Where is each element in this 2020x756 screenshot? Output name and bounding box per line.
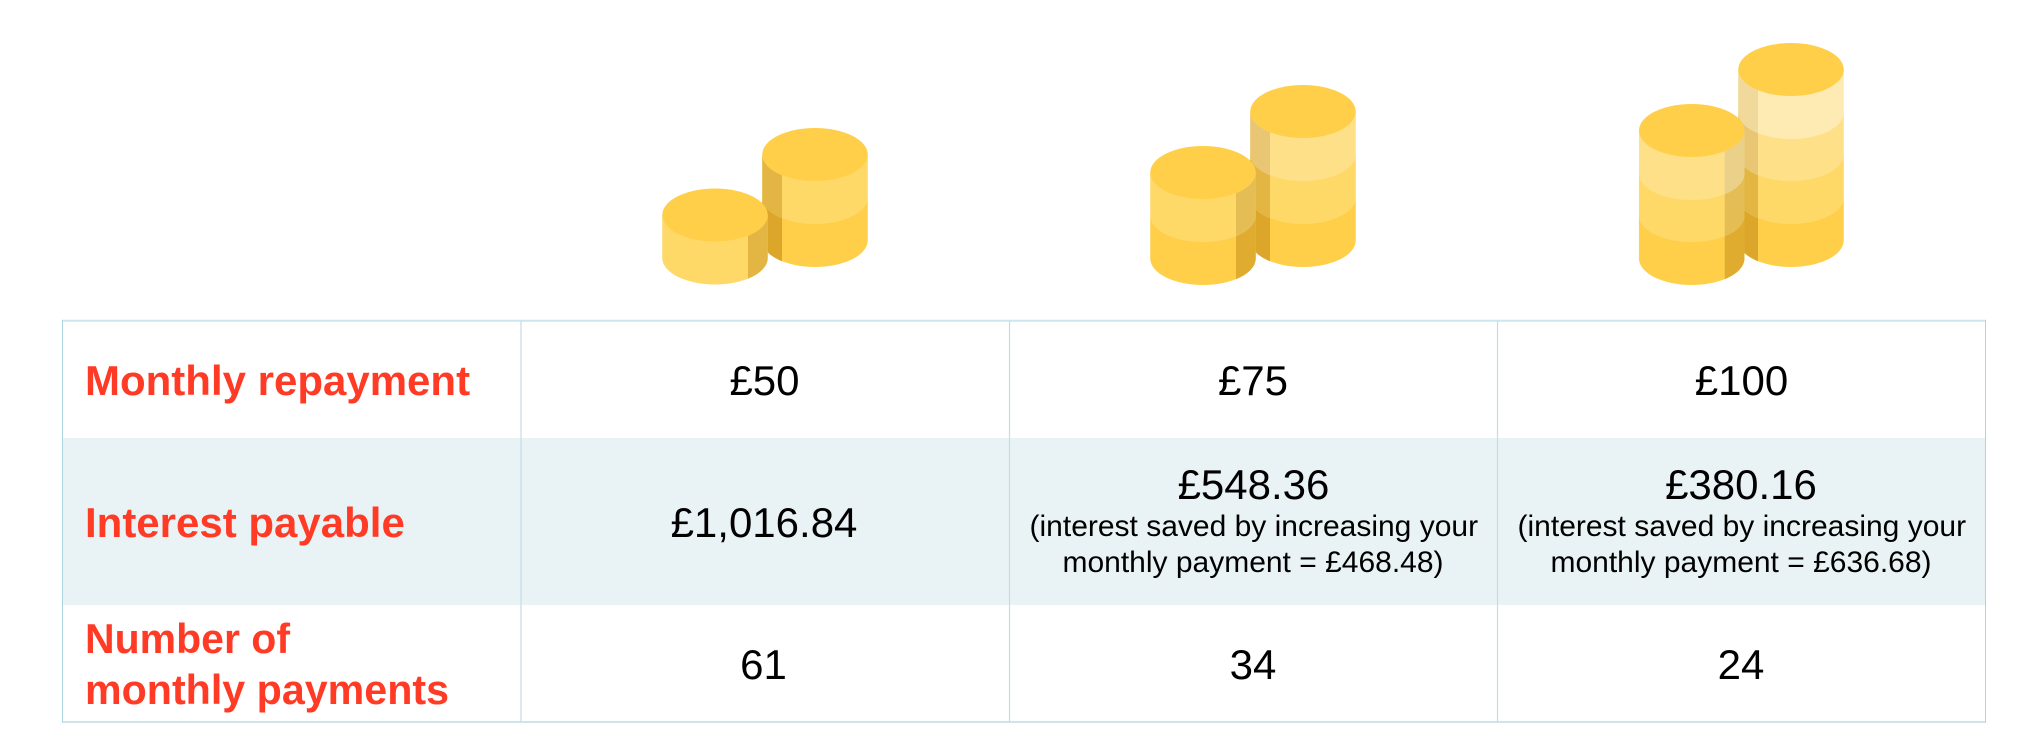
icon: coin pile for £100 [1639,43,1844,285]
table frame and rows [62,320,1986,723]
cell: £100 interest and saving: (interest saved by increasing your [1518,510,1966,543]
cell: £75 interest and saving: monthly payment = £468.48) [1062,546,1444,579]
row: number of monthly payments [85,615,1764,713]
cell: £100 interest and saving [1518,461,1966,579]
row heading: interest payable: Interest payable [85,499,405,546]
value: £1,016.84: £1,016.84 [671,499,857,546]
value: £75: £75 [1218,357,1288,404]
cell: £75 interest and saving [1030,461,1478,579]
row heading: number of monthly payments: Number of [85,615,291,662]
value: £100: £100 [1695,357,1788,404]
row: monthly repayment [85,357,1788,404]
cell: £100 interest and saving: £380.16 [1665,461,1817,508]
cell: £100 interest and saving: monthly payment = £636.68) [1550,546,1932,579]
value: 24: 24 [1718,641,1764,688]
value: 61: 61 [740,641,787,688]
row heading: monthly repayment: Monthly repayment [85,357,470,404]
value: 34: 34 [1230,641,1276,688]
value: £50: £50 [729,357,800,404]
row heading: number of monthly payments: monthly payments [85,666,449,713]
icon: coin pile for £75 [1150,85,1356,285]
cell: £75 interest and saving: £548.36 [1178,461,1329,508]
cell: £75 interest and saving: (interest saved by increasing your [1030,510,1478,543]
icon: two-stack coin pile for £50 [662,128,868,284]
row: interest payable [85,461,1966,579]
